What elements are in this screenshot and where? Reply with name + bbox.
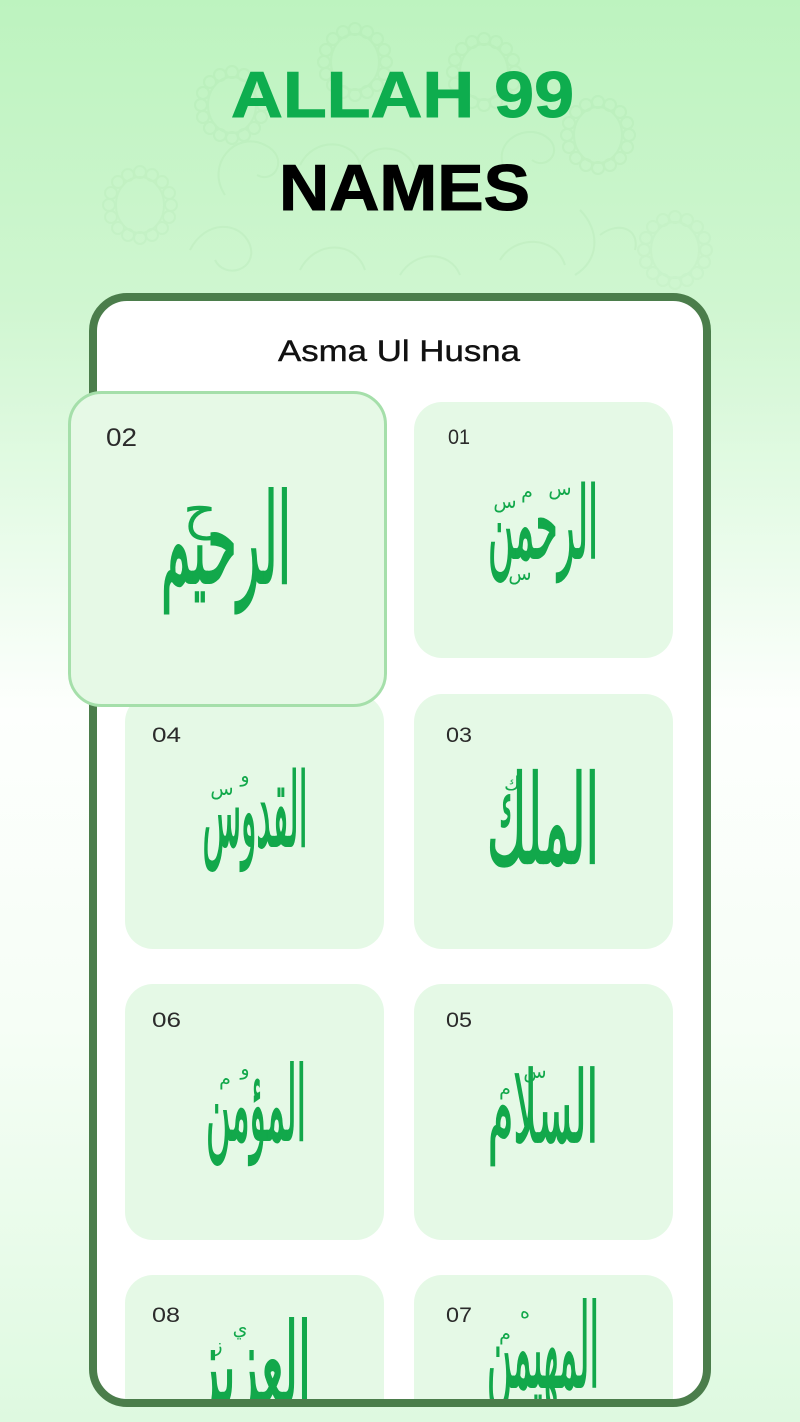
card 06	[125, 984, 384, 1240]
card 01: 01	[448, 426, 470, 449]
highlighted card 02	[70, 392, 386, 706]
background ornament pattern	[103, 23, 712, 289]
card 06: م	[219, 1068, 231, 1090]
highlighted card 02: ح	[183, 481, 217, 541]
card 07: 07	[446, 1304, 472, 1327]
card 03: الملك	[487, 751, 599, 893]
card 05: م	[499, 1078, 511, 1100]
card 03: ك	[504, 773, 520, 795]
card 05: السلام	[488, 1051, 598, 1166]
card 08: 08	[152, 1304, 180, 1327]
card 07: المهيمن	[487, 1281, 599, 1415]
card 01	[414, 402, 673, 658]
title	[231, 58, 574, 224]
card 05: 05	[446, 1009, 472, 1032]
heading: Asma Ul Husna: Asma Ul Husna	[278, 335, 520, 368]
card 05	[414, 984, 673, 1240]
card 04: س	[210, 778, 234, 800]
title line: NAMES: NAMES	[279, 151, 530, 224]
card 03: 03	[446, 724, 472, 747]
highlighted card 02: الرحيم	[161, 468, 291, 614]
card 03	[414, 694, 673, 949]
card 08	[125, 1275, 384, 1399]
card 07: م	[499, 1323, 511, 1345]
card 06: و	[239, 1058, 250, 1080]
card 07: ه	[520, 1301, 530, 1323]
card 04: القدوس	[203, 750, 307, 871]
card 07	[414, 1275, 673, 1399]
title line: ALLAH 99: ALLAH 99	[231, 58, 574, 131]
card 08: ز	[212, 1335, 223, 1357]
card 06: المؤمن	[206, 1046, 306, 1165]
card 01: س	[548, 478, 572, 500]
card grid	[125, 402, 673, 1422]
highlighted card 02: 02	[106, 424, 137, 452]
card 01: الرحمن	[488, 466, 598, 582]
card 01: س	[508, 563, 532, 585]
card 06: 06	[152, 1009, 181, 1032]
card 04: 04	[152, 724, 181, 747]
card 05: س	[523, 1061, 547, 1083]
card 04	[125, 694, 384, 949]
card 08: ي	[233, 1318, 247, 1340]
card 04: و	[239, 765, 250, 787]
card 01: س	[493, 491, 517, 513]
phone frame	[93, 297, 707, 1403]
card 01: م	[521, 481, 533, 503]
